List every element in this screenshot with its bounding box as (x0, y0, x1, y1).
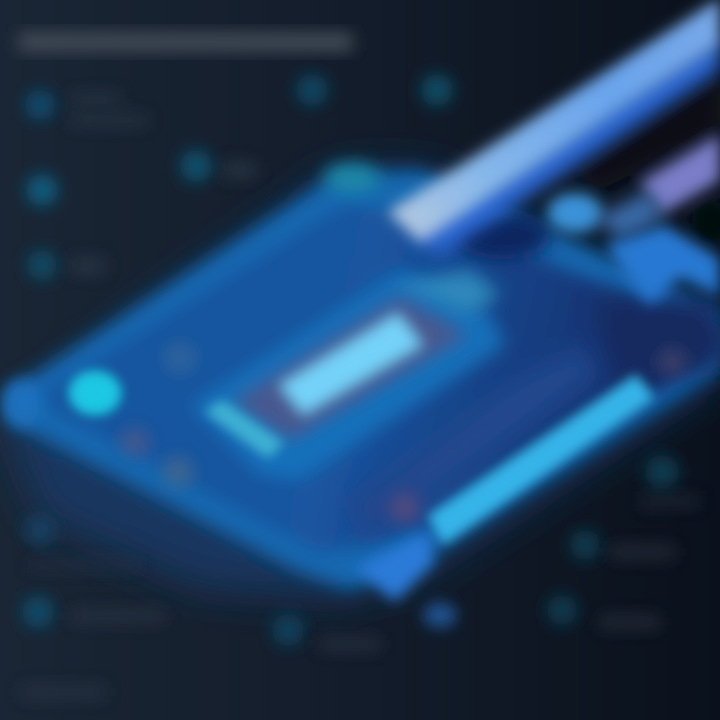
text block: upper-left blurred labels (70, 94, 257, 274)
plate glow (0, 170, 720, 600)
bright band around central panel (190, 270, 505, 480)
purple beam left fade (595, 190, 665, 240)
lower-left light strip (205, 400, 284, 458)
beams: upper-right bars (388, 0, 720, 305)
dark gap (570, 72, 720, 190)
light blue connector (547, 193, 603, 233)
blue strut (605, 225, 720, 305)
left blob (2, 379, 42, 427)
central dark panel (232, 296, 468, 440)
icons: upper-left teal dots (25, 74, 453, 280)
beam lower edge (410, 35, 720, 255)
top teal corner (324, 163, 380, 193)
plate surface (40, 205, 720, 552)
teal band highlight (395, 270, 500, 315)
lower band shadow (345, 345, 600, 545)
plate: main blue board (0, 163, 720, 628)
bright beam (388, 0, 720, 242)
upper surface shadow under beam (455, 212, 551, 260)
dark right gap (692, 202, 720, 242)
purple beam (640, 134, 720, 214)
cyan glowing dot (69, 371, 121, 415)
text block: lower blurred labels (20, 496, 700, 698)
bottom corner tab (423, 602, 457, 628)
plate rim (8, 170, 720, 590)
lower-right glowing strip (428, 375, 654, 544)
bottom corner bracket (355, 532, 435, 602)
icons: lower teal dots (22, 455, 679, 646)
right surface shadow (590, 295, 720, 390)
purple details (121, 341, 685, 522)
heading: blurred title (18, 32, 353, 52)
central glowing bar (278, 312, 424, 416)
